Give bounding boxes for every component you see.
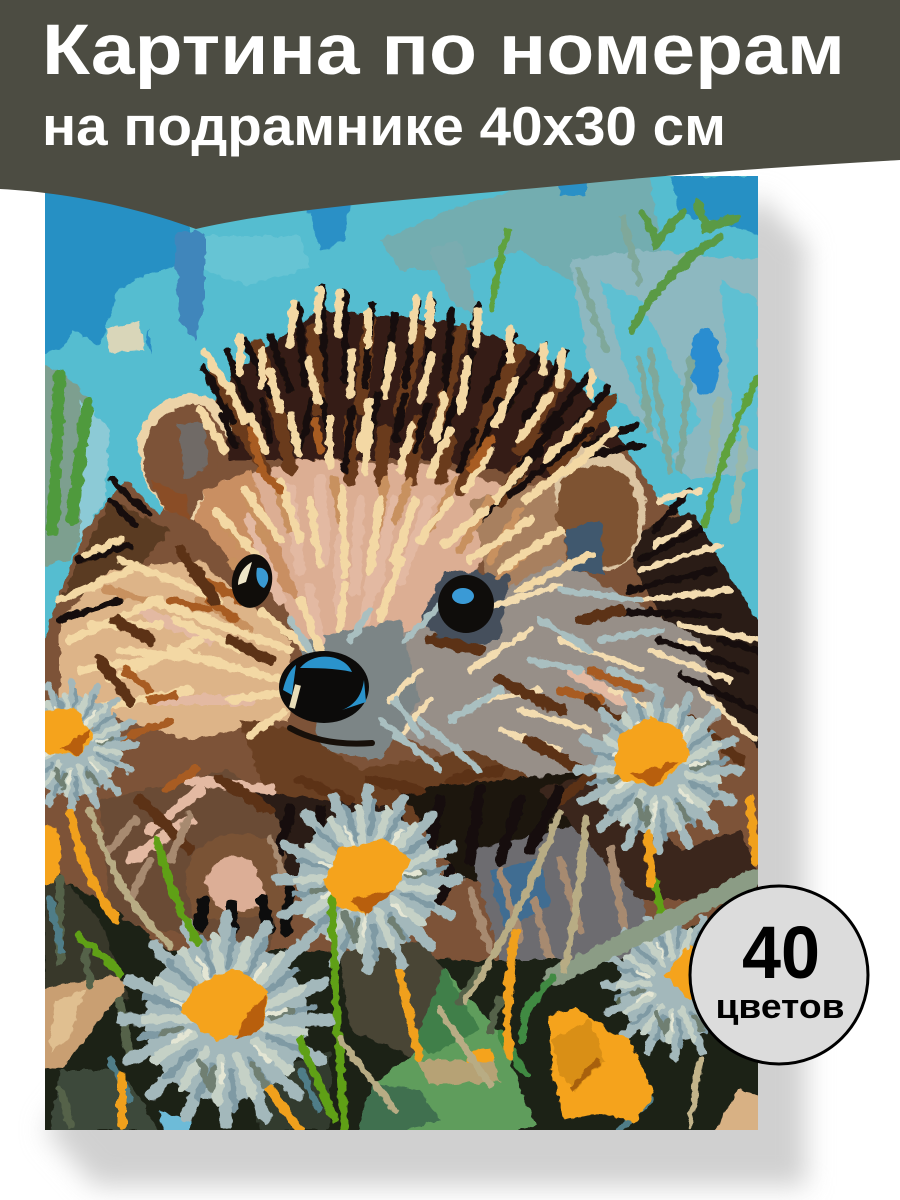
chin dark strokes <box>250 790 560 900</box>
hedgehog body <box>30 310 770 980</box>
dandelion centres <box>30 708 720 1040</box>
lower fur strokes <box>110 815 625 960</box>
cream fur strokes <box>60 480 590 735</box>
title: Картина по номерам <box>42 11 845 90</box>
centre shading <box>60 728 680 1040</box>
green mass <box>356 968 535 1135</box>
paw <box>185 833 290 930</box>
cream spines <box>200 290 615 500</box>
right-side cream spines <box>390 490 757 750</box>
foreground grass blades <box>70 800 756 1130</box>
peach fur strokes <box>130 480 620 860</box>
sky background <box>45 176 758 639</box>
forehead <box>225 460 520 650</box>
brown spine strokes <box>215 320 610 500</box>
grass blades in sky <box>52 204 758 530</box>
grey muzzle <box>402 559 722 779</box>
canvas shadow <box>45 195 806 1186</box>
dandelions <box>9 682 746 1124</box>
painted layer <box>45 176 758 1130</box>
subtitle: на подрамнике 40х30 см <box>42 95 726 157</box>
header banner <box>0 0 900 229</box>
brown fur strokes <box>110 420 640 790</box>
badge: 40 colours: 40 <box>742 911 820 994</box>
painting: hedgehog among dandelions <box>45 176 758 1130</box>
nose and mouth <box>279 651 372 744</box>
beige leaf <box>45 974 126 1069</box>
tan fur strokes <box>105 480 530 630</box>
foreground meadow <box>45 873 758 1130</box>
orange flower <box>548 1008 654 1123</box>
dark spines <box>60 287 757 710</box>
grey-blue fur strokes <box>290 590 660 770</box>
ears <box>138 394 646 575</box>
dark brown fur strokes <box>100 550 740 850</box>
badge: 40 colours: цветов <box>716 988 844 1026</box>
eyes <box>228 551 494 633</box>
badge: 40 colours <box>690 886 868 1064</box>
